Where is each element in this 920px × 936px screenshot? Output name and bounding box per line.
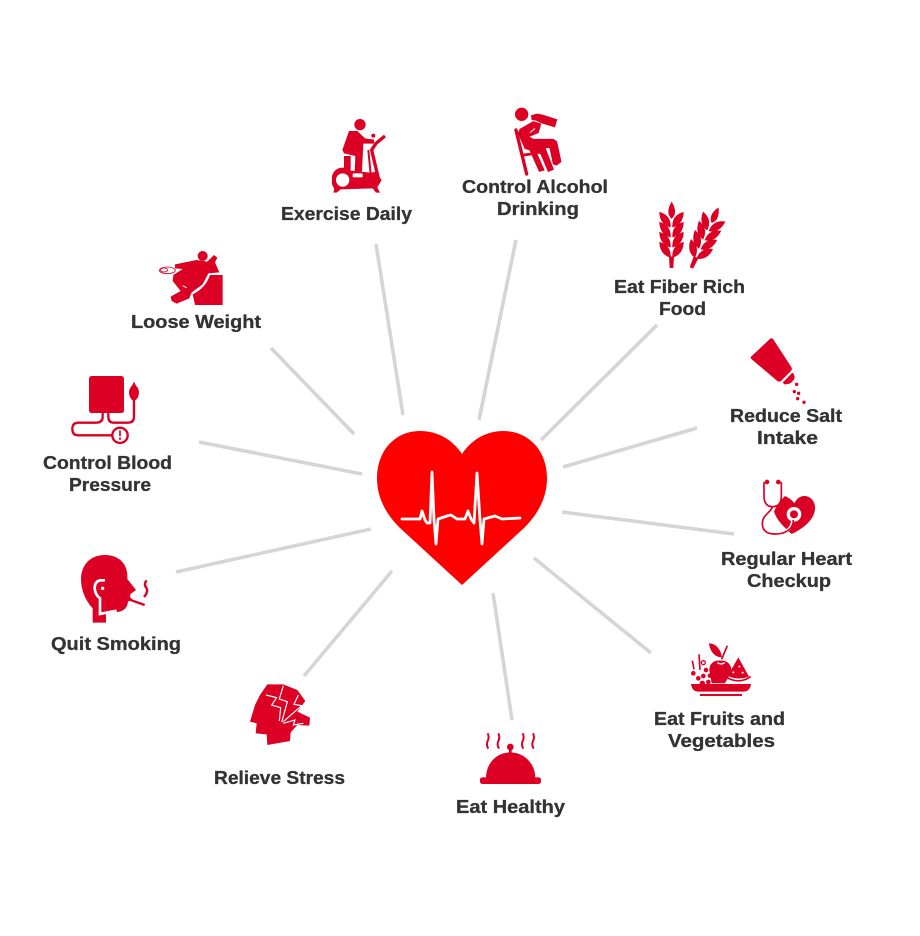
label: Loose Weight bbox=[131, 311, 261, 332]
label: Control Alcohol bbox=[462, 176, 608, 197]
item: Reduce Salt Intake bbox=[730, 338, 842, 448]
left wheat bbox=[660, 202, 683, 268]
item: Regular Heart Checkup: Checkup bbox=[747, 570, 831, 591]
right wheat bbox=[681, 203, 729, 272]
item: Reduce Salt Intake: Intake bbox=[757, 427, 818, 448]
item: Eat Healthy bbox=[456, 733, 566, 817]
icon: fruit bowl bbox=[691, 643, 751, 696]
item: Eat Fiber Rich Food bbox=[614, 202, 745, 319]
label: Eat Fruits and bbox=[654, 708, 785, 729]
icon: wheat stalks bbox=[660, 202, 729, 272]
item: Quit Smoking bbox=[51, 555, 181, 654]
icon: exercise bike bbox=[332, 119, 385, 193]
central heart with ECG bbox=[377, 431, 547, 585]
item: Relieve Stress bbox=[214, 684, 345, 788]
icon: blood pressure cuff bbox=[72, 376, 139, 443]
icon: smoking head bbox=[81, 555, 147, 623]
item: Eat Fiber Rich Food: Food bbox=[659, 298, 706, 319]
label: Reduce Salt bbox=[730, 405, 842, 426]
icon: person sitting with plate bbox=[159, 251, 223, 305]
label: Control Blood bbox=[43, 452, 172, 473]
label: Eat Healthy bbox=[456, 796, 566, 817]
connector lines bbox=[176, 240, 734, 720]
item: Exercise Daily bbox=[281, 119, 413, 224]
icon: salt shaker bbox=[751, 338, 806, 404]
icon: heart with stethoscope bbox=[762, 480, 815, 534]
item: Eat Fruits and Vegetables bbox=[654, 643, 785, 751]
item: Control Alcohol Drinking bbox=[462, 108, 608, 219]
item: Control Blood Pressure bbox=[43, 376, 172, 495]
icon: head with lightning bbox=[250, 684, 310, 745]
item: Regular Heart Checkup bbox=[721, 480, 852, 591]
item: Eat Fruits and Vegetables: Vegetables bbox=[668, 730, 775, 751]
item: Control Blood Pressure: Pressure bbox=[69, 474, 151, 495]
label: Relieve Stress bbox=[214, 767, 345, 788]
heart shape bbox=[377, 431, 547, 585]
icon: serving cloche bbox=[480, 733, 541, 784]
icon: person drinking on chair bbox=[515, 108, 561, 174]
label: Exercise Daily bbox=[281, 203, 413, 224]
ECG trace bbox=[402, 472, 520, 544]
label: Eat Fiber Rich bbox=[614, 276, 745, 297]
item: Loose Weight bbox=[131, 251, 261, 332]
label: Regular Heart bbox=[721, 548, 852, 569]
label: Quit Smoking bbox=[51, 633, 181, 654]
item: Control Alcohol Drinking: Drinking bbox=[497, 198, 579, 219]
